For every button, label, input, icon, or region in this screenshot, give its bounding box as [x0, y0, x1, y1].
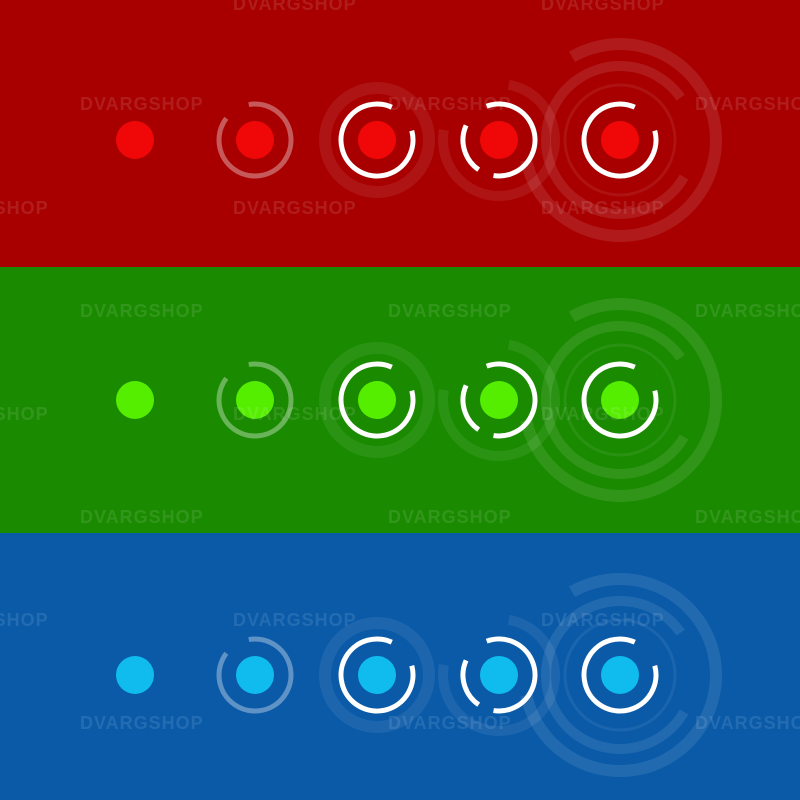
watermarks: DVARGSHOP [541, 198, 665, 218]
red icons row [116, 9, 751, 271]
watermarks: DVARGSHOP [80, 713, 204, 733]
watermarks: DVARGSHOP [233, 198, 357, 218]
panel: blue band [0, 533, 800, 800]
green icons row [116, 269, 751, 531]
watermarks: DVARGSHOP [80, 94, 204, 114]
panel: red band [0, 0, 800, 271]
watermarks: DVARGSHOP [388, 507, 512, 527]
watermarks: DVARGSHOP [233, 610, 357, 630]
watermarks: DVARGSHOP [388, 301, 512, 321]
watermarks: DVARGSHOP [233, 404, 357, 424]
blue icons row [116, 544, 751, 800]
watermarks: DVARGSHOP [80, 507, 204, 527]
panel: green band [0, 267, 800, 533]
watermarks: DVARGSHOP [388, 713, 512, 733]
watermarks: DVARGSHOP [80, 301, 204, 321]
watermarks: DVARGSHOP [388, 94, 512, 114]
watermarks: DVARGSHOP [541, 404, 665, 424]
watermarks: DVARGSHOP [541, 610, 665, 630]
